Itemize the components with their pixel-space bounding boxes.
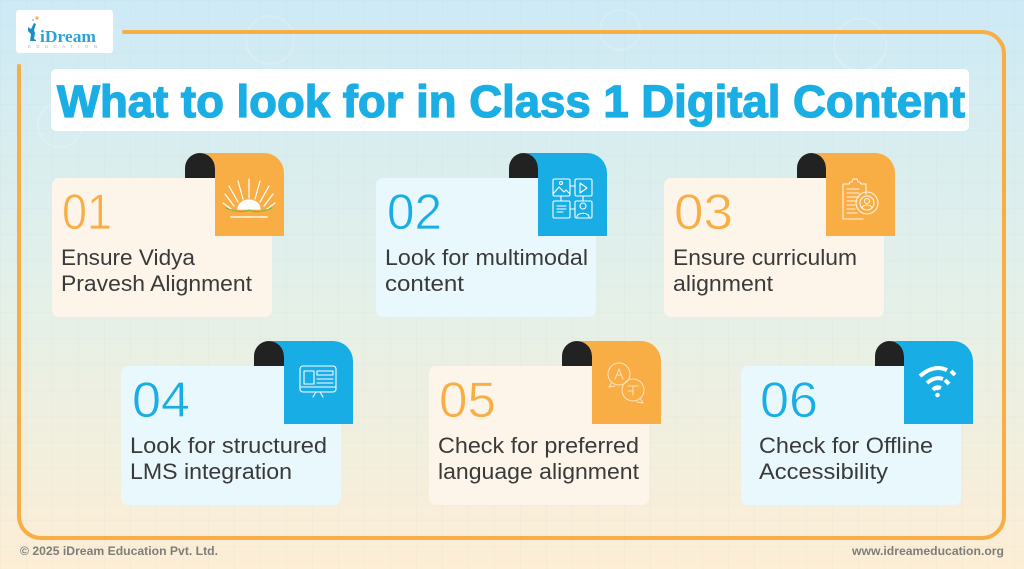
flag: card 06 [875,341,973,424]
icon: presentation screen [300,366,336,397]
card 05 [429,341,661,505]
card 06: Accessibility [759,459,888,484]
card 01: 01 [62,184,112,240]
footer: website: www.idreameducation.org [851,546,1004,558]
card 03: alignment [673,271,773,296]
icon: language bubbles [608,363,644,403]
logo: EDUCATION [28,44,97,49]
flag: card 01 [185,153,284,236]
card 05: 05 [439,372,496,428]
card 06 [741,341,973,505]
flag: card 05 [562,341,661,424]
card 02: content [385,271,464,296]
card 03 [664,153,895,317]
card 03: 03 [674,184,733,240]
flag: card 03 [797,153,895,236]
logo: iDream [40,27,96,46]
card 04 [121,341,353,505]
card 01: Pravesh Alignment [61,271,252,296]
card 02: Look for multimodal [385,245,588,270]
icon: wifi [920,368,955,396]
logo [16,10,113,53]
card 02 [376,153,607,317]
card 02: 02 [387,184,442,240]
flag: card 02 [509,153,607,236]
footer: copyright: © 2025 iDream Education Pvt. Ltd. [20,546,218,558]
title: What to look for in Class 1 Digital Content [57,76,965,127]
flag: card 04 [254,341,353,424]
card 03: Ensure curriculum [673,245,857,270]
card 06: 06 [760,372,818,428]
card 04: Look for structured [130,433,327,458]
card 01 [52,153,284,317]
card 06: Check for Offline [759,433,933,458]
icon: clipboard with gear [843,179,878,219]
card 04: 04 [132,372,190,428]
icon: rising sun emblem [223,179,275,217]
card 04: LMS integration [130,459,292,484]
card 05: language alignment [438,459,639,484]
card 05: Check for preferred [438,433,639,458]
icon: multimodal media [553,179,592,218]
card 01: Ensure Vidya [61,245,196,270]
